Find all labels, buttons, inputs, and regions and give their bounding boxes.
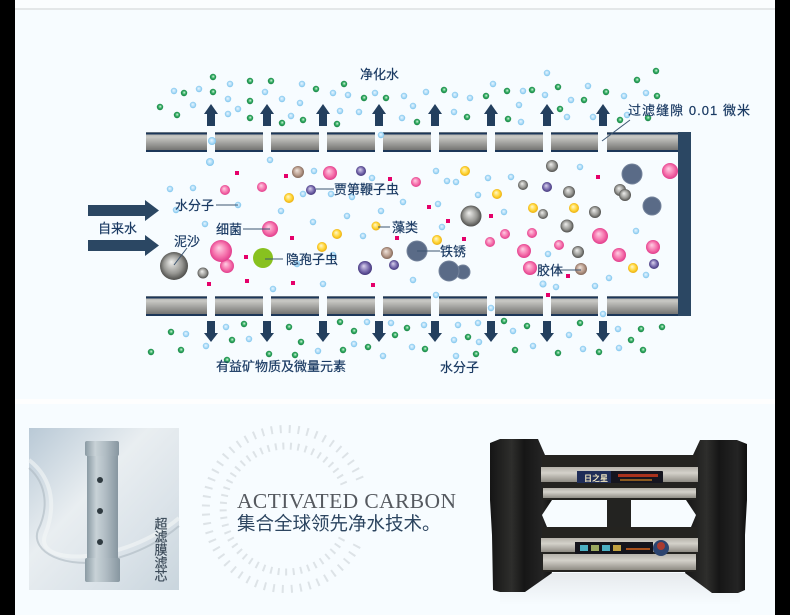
subheading: 集合全球领先净水技术。 (237, 513, 441, 534)
bacteria particles (210, 163, 678, 275)
upper label: 日之星 (584, 473, 608, 483)
sand particles (160, 160, 631, 280)
giardia particles (306, 166, 659, 275)
upper cylinder (541, 455, 698, 500)
label: ultrafiltration cartridge: 超滤膜滤芯 (152, 517, 168, 582)
product photo: water purifier (490, 439, 747, 605)
callout lines (174, 120, 630, 270)
reflection (500, 573, 740, 605)
upper label (577, 471, 663, 483)
label: tap water: 自来水 (98, 221, 137, 236)
bottom filter membrane (146, 296, 678, 316)
minerals below the filter (148, 318, 665, 363)
water molecules below the filter (183, 319, 622, 359)
impurity dots (207, 171, 600, 297)
centre connector (607, 498, 631, 535)
colloid particles (292, 166, 587, 275)
left housing (490, 439, 552, 592)
cryptosporidium particle (253, 248, 273, 268)
label: sand: 泥沙 (174, 234, 200, 249)
water molecules above the filter (171, 70, 649, 125)
panel: ultrafiltration cartridge photo (29, 428, 179, 590)
upward arrows (204, 104, 610, 126)
label: rust: 铁锈 (440, 244, 466, 259)
label: bacteria: 细菌 (216, 222, 242, 237)
mineral particles above the filter (157, 68, 660, 127)
water molecules inside the filter (167, 132, 649, 317)
lower cylinder (541, 527, 698, 572)
algae particles (284, 166, 638, 273)
label: giardia: 贾第鞭子虫 (334, 182, 399, 197)
filter end cap (678, 132, 691, 316)
label: water molecule: 水分子 (175, 198, 214, 213)
label: filter gap: 过滤缝隙 0.01 微米 (628, 103, 750, 118)
right housing (685, 440, 747, 593)
radial burst decoration (206, 429, 360, 589)
label: minerals and trace elements: 有益矿物质及微量元素 (216, 359, 346, 374)
label: colloid: 胶体 (537, 263, 563, 278)
downward arrows (204, 321, 610, 342)
lower label (575, 540, 669, 556)
inlet arrows (88, 200, 159, 256)
icon: filter cartridge (85, 441, 120, 582)
label: purified water: 净化水 (360, 67, 399, 82)
label: water molecule bottom: 水分子 (440, 360, 479, 375)
rust particles (407, 164, 661, 281)
label: cryptosporidium: 隐孢子虫 (286, 252, 338, 267)
label: algae: 藻类 (392, 220, 418, 235)
top filter membrane (146, 132, 678, 152)
heading: activated carbon: ACTIVATED CARBON (237, 489, 456, 513)
